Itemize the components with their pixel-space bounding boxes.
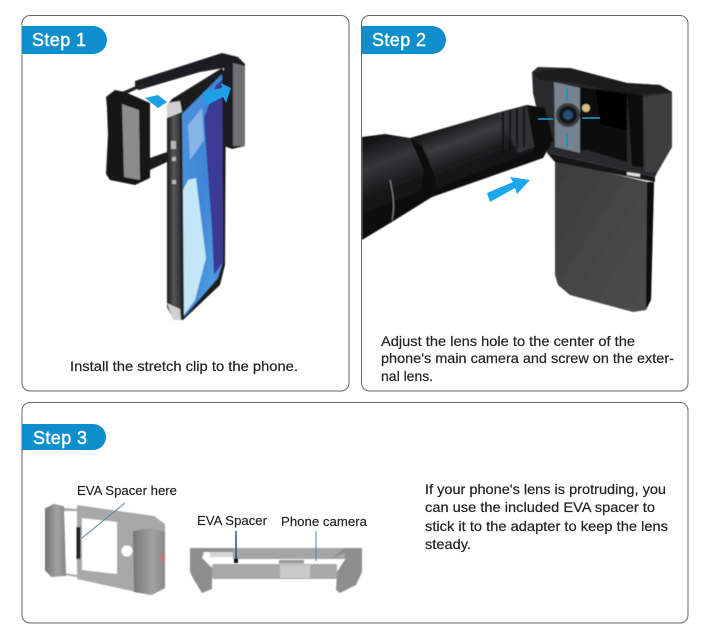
badge: step 2 (362, 26, 446, 54)
panel: step 3 (22, 402, 688, 623)
label: Phone camera: Phone camera (281, 514, 368, 529)
badge: step 1 (22, 26, 107, 54)
arrow: left clip arrow (145, 95, 167, 108)
caption: step 3 (425, 481, 668, 552)
caption: step 2: Adjust the lens hole to the center of the (381, 333, 635, 349)
caption: step 2 (381, 333, 674, 384)
diagram: clip front view (46, 505, 165, 595)
badge: step 3 (22, 424, 106, 450)
badge: step 1: Step 1 (32, 30, 86, 50)
caption: step 2: nal lens. (381, 368, 433, 384)
caption: step 3: If your phone's lens is protruding, you (425, 481, 666, 497)
illustration: telephoto lens (362, 105, 553, 240)
panel: step 1 (22, 16, 349, 391)
panel: step 2 (362, 16, 688, 391)
label: Phone camera (281, 514, 368, 561)
label: EVA Spacer here (77, 483, 177, 538)
label: EVA Spacer here: EVA Spacer here (77, 483, 177, 498)
caption: step 1: Install the stretch clip to the phone. (70, 358, 298, 374)
badge: step 2: Step 2 (372, 30, 426, 50)
label: EVA Spacer: EVA Spacer (197, 513, 268, 528)
arrow: right clip arrow (203, 83, 231, 106)
badge: step 3: Step 3 (33, 428, 87, 448)
caption: step 3: can use the included EVA spacer to (425, 499, 655, 515)
crosshair guide (538, 88, 600, 147)
caption: step 3: stick it to the adapter to keep the lens (425, 518, 668, 534)
label: EVA Spacer (197, 513, 268, 558)
illustration: phone back with clip (532, 67, 672, 312)
illustration: clip on phone (106, 53, 245, 320)
caption: step 2: phone's main camera and screw on the exter- (381, 350, 674, 366)
diagram: clip side view (190, 548, 362, 593)
arrow: push lens (487, 177, 530, 202)
caption: step 3: steady. (425, 536, 471, 552)
